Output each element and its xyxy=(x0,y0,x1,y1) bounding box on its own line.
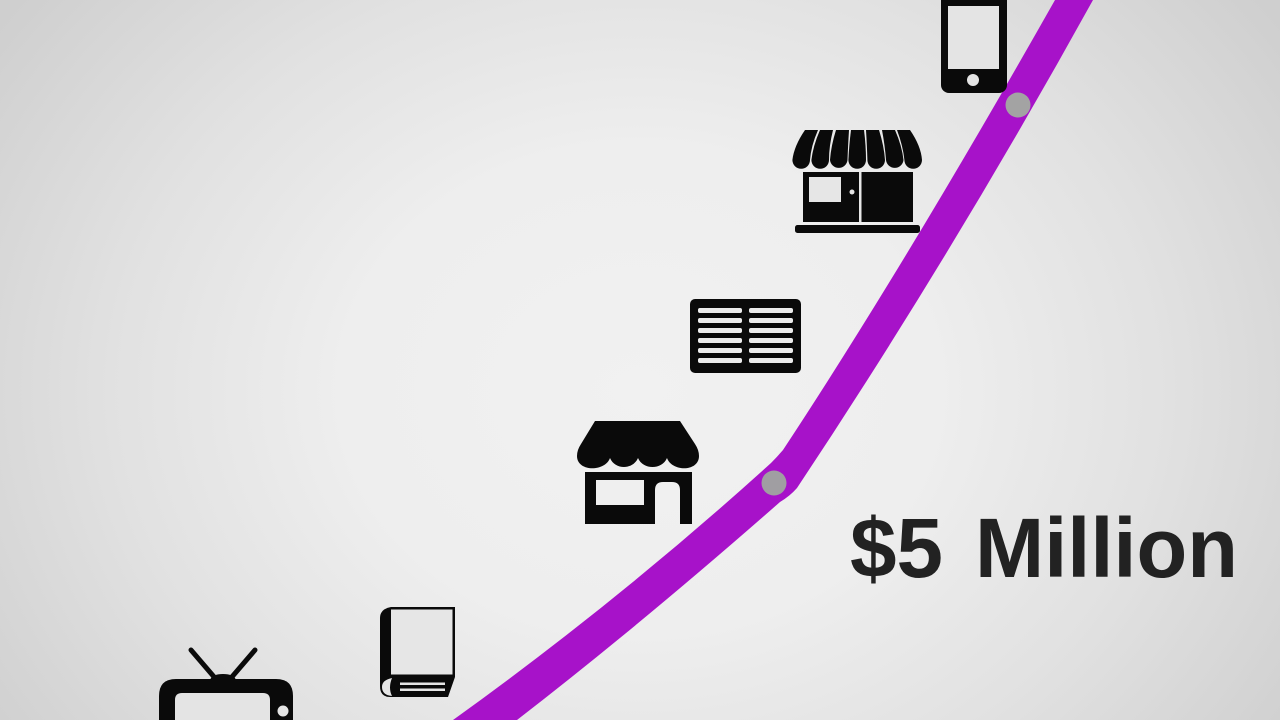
growth curve xyxy=(439,0,1098,720)
revenue label: Million xyxy=(975,501,1238,595)
icon: scalloped awning store xyxy=(577,421,699,524)
icon: closed book xyxy=(380,607,455,697)
revenue label xyxy=(850,501,1238,595)
milestone dot: lower xyxy=(762,470,786,496)
icon: open book xyxy=(690,299,801,373)
icon: smartphone xyxy=(941,0,1007,93)
revenue label: $5 xyxy=(850,501,943,595)
milestone dot: upper xyxy=(1006,92,1030,118)
icon: television xyxy=(159,650,293,720)
icon: striped awning store xyxy=(792,130,922,233)
